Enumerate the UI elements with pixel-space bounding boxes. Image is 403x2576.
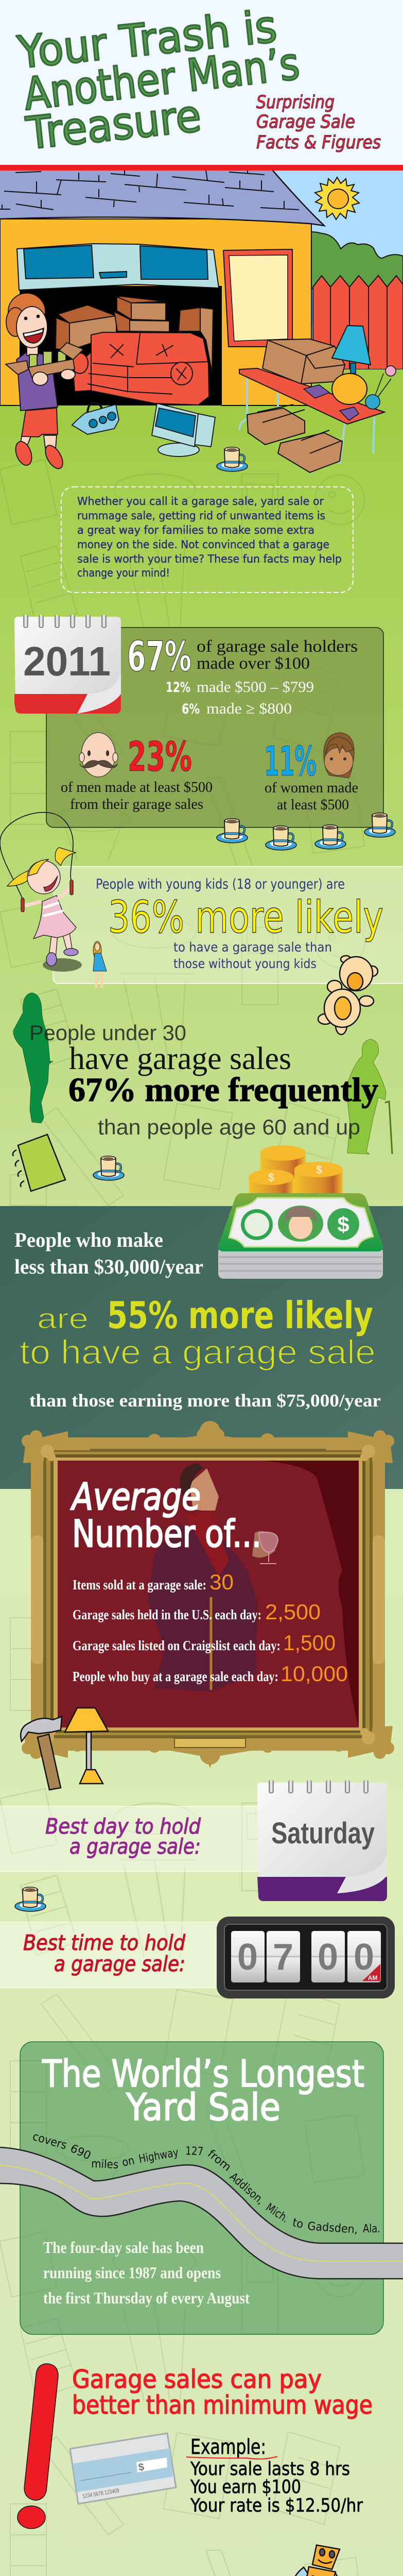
panel heading: Number of... <box>72 1512 261 1555</box>
ground boxes <box>247 404 342 472</box>
text: example calculation <box>186 2435 363 2516</box>
icon: bank check: 1234 5678 123409 <box>82 2487 120 2500</box>
intro paragraph: Whether you call it a garage sale, yard sale or <box>77 495 324 507</box>
text: people under 30: People under 30 <box>29 1021 186 1045</box>
stat: 12% made $500-$799: made $500 – $799 <box>197 679 314 696</box>
icon: notebook <box>13 1134 65 1191</box>
stat: 11% of women: 11% <box>264 739 317 785</box>
intro paragraph: change your mind! <box>77 567 170 579</box>
text: road route: Mich. <box>264 2201 291 2226</box>
garage door <box>17 244 219 290</box>
computer monitor <box>152 403 215 456</box>
title: Treasure <box>24 90 203 160</box>
text: road route: miles <box>91 2158 119 2172</box>
icon: calendar 2011: 2011 <box>23 638 111 684</box>
stat rows: Items sold at a garage sale: <box>73 1577 206 1592</box>
text: example calculation: You earn $100 <box>190 2477 301 2498</box>
stat rows: Garage sales listed on Craigslist each day: <box>73 1638 281 1653</box>
icon: flip clock 07:00 AM: 0 <box>237 1937 258 1978</box>
icon: coffee cups row <box>217 813 395 850</box>
icon: calendar 2011 <box>14 615 121 714</box>
text: young kids end <box>173 940 332 971</box>
icon: gold coins: $ <box>316 1163 322 1176</box>
frame <box>22 1421 394 1768</box>
garage interior <box>20 286 222 405</box>
text: young kids end: to have a garage sale than <box>173 940 332 955</box>
text: young kids lead: People with young kids (18 or younger) are <box>96 876 345 892</box>
band: best time: Best time to hold <box>23 1930 186 1955</box>
icon: doll <box>93 941 107 988</box>
text: four-day sale: the first Thursday of every August <box>43 2289 250 2307</box>
text: income comparison: People who make <box>14 1228 163 1251</box>
icon: stack of money <box>218 1193 383 1279</box>
text: road route: 690 <box>68 2142 93 2163</box>
background: sky header <box>0 0 403 165</box>
text: income comparison: to have a garage sale <box>20 1333 376 1371</box>
stat rows: People who buy at a garage sale each day: <box>73 1669 278 1684</box>
road <box>0 2147 403 2279</box>
icon: flip clock 07:00 AM: 0 <box>318 1937 338 1978</box>
icon: gold coins <box>249 1145 343 1194</box>
stat: 11% of women: of women made <box>265 779 358 796</box>
background: pale green lower section <box>0 1489 403 2576</box>
subtitle: Surprising <box>256 92 335 113</box>
background: dark teal income section <box>0 1206 403 1489</box>
band: best time <box>0 1922 226 1988</box>
text: four-day sale: running since 1987 and opens <box>43 2263 221 2282</box>
icon: robot <box>290 2545 343 2576</box>
text: income comparison: are <box>37 1302 89 1334</box>
text: four-day sale <box>43 2238 250 2307</box>
stat: 23% of men: from their garage sales <box>70 796 203 812</box>
text: example calculation: Your rate is $12.50/hr <box>190 2495 363 2516</box>
text: road route: on <box>121 2154 136 2170</box>
panel heading <box>42 2052 364 2129</box>
stat rows: Garage sales held in the U.S. each day: <box>73 1607 261 1622</box>
band: best day: Best day to hold <box>45 1814 201 1839</box>
icon: coffee cup <box>217 447 248 471</box>
stat: 67% made over $100 <box>127 633 358 681</box>
silhouette: young woman <box>13 993 53 1123</box>
stat rows: 2,500 <box>265 1600 321 1624</box>
stat: 67% made over $100: of garage sale holders <box>197 637 358 656</box>
panel heading: Average <box>71 1475 201 1518</box>
text: road route: 127 <box>185 2145 204 2158</box>
text: people under 30: 67% more frequently <box>68 1071 378 1109</box>
stat: 12% made $500-$799: 12% <box>166 680 190 696</box>
panel heading <box>71 1475 261 1555</box>
text: road route: from <box>205 2147 234 2174</box>
icon: stack of money: $ <box>337 1212 349 1236</box>
text: road route: Gadsden, <box>307 2220 358 2236</box>
text: better than minimum wage <box>72 2365 373 2420</box>
text: example calculation: Example: <box>190 2435 266 2459</box>
subtitle <box>256 92 381 153</box>
band: best time: a garage sale: <box>54 1952 185 1976</box>
house wall <box>0 219 311 405</box>
stat: 11% of women <box>264 739 358 813</box>
man holding box <box>6 293 83 471</box>
icon: man with moustache <box>79 733 118 777</box>
roof <box>0 171 324 226</box>
stat rows: 1,500 <box>283 1631 336 1655</box>
icon: sun <box>315 177 359 219</box>
icon: flip clock 07:00 AM <box>217 1917 395 1998</box>
icon: exclamation mark <box>17 2364 58 2529</box>
text: road route: to <box>291 2216 305 2231</box>
stacked boxes in garage <box>56 296 213 372</box>
text: people under 30: have garage sales <box>69 1041 291 1076</box>
text: example calculation: Your sale lasts 8 hrs <box>190 2459 350 2480</box>
text: road route: Highway <box>138 2146 180 2166</box>
panel: picture frame average numbers <box>22 1421 394 1768</box>
subtitle: Garage Sale <box>256 112 355 132</box>
text: income comparison: less than $30,000/year <box>14 1255 203 1278</box>
illustration: house and garage sale <box>0 171 403 472</box>
band: best day: a garage sale: <box>69 1834 201 1859</box>
icon: coffee cup <box>15 1887 46 1911</box>
yard sale table <box>239 326 396 464</box>
intro paragraph: a great way for families to make some extra <box>77 524 314 536</box>
icon: gold coins: $ <box>268 1171 274 1184</box>
stat rows <box>73 1570 348 1686</box>
title: Another Man’s <box>21 38 302 121</box>
stat: 23% of men: 23% <box>128 734 192 781</box>
text: road route: Addison, <box>227 2171 267 2207</box>
icon: bank check <box>70 2433 176 2504</box>
icon: bank check: $ <box>137 2461 145 2473</box>
painting canvas <box>58 1461 359 1727</box>
intro paragraph: sale is worth your time? These fun facts may help <box>77 553 342 565</box>
icon: flip clock 07:00 AM: 0 <box>354 1937 374 1978</box>
text: young kids end: those without young kids <box>173 956 317 971</box>
background: green lawn section <box>0 405 403 1207</box>
band: best day <box>0 1806 268 1871</box>
panel: world's longest yard sale <box>0 2042 403 2334</box>
icon: woman face <box>324 733 354 778</box>
text: income comparison: than those earning more than $75,000/year <box>29 1391 381 1411</box>
stat rows: 30 <box>209 1570 234 1594</box>
stat: 23% of men <box>61 734 213 812</box>
icon: hammer <box>21 1717 62 1790</box>
icon: flip clock 07:00 AM: 7 <box>273 1937 293 1978</box>
text: road route <box>31 2130 380 2236</box>
subtitle: Facts & Figures <box>256 132 381 153</box>
silhouette: old man with cane <box>346 1039 392 1154</box>
title <box>15 1 302 160</box>
icon: yellow lamp <box>65 1708 108 1784</box>
house window <box>223 249 292 347</box>
intro text box <box>61 487 353 592</box>
panel heading: Yard Sale <box>126 2086 281 2129</box>
icon: teddy bear <box>318 956 378 1035</box>
fence <box>313 276 403 371</box>
illustration: girl jumping rope <box>0 812 82 972</box>
intro paragraph: money on the side. Not convinced that a garage <box>77 538 329 551</box>
stat: 6% made at least $800: 6% <box>182 701 200 717</box>
icon: coffee cup <box>93 1156 124 1180</box>
stat: 6% made at least $800: made ≥ $800 <box>206 700 292 717</box>
panel: earnings stats <box>46 628 383 827</box>
icon: Saturday calendar: Saturday <box>271 1817 375 1850</box>
panel: young kids <box>0 867 403 984</box>
icon: Saturday calendar <box>257 1780 387 1901</box>
red sofa <box>72 332 209 405</box>
title: Your Trash is <box>15 1 279 79</box>
intro paragraph: rummage sale, getting rid of unwanted items is <box>77 510 325 522</box>
intro paragraph <box>77 495 342 579</box>
boombox <box>72 403 119 434</box>
icon: flip clock 07:00 AM: AM <box>368 1974 377 1981</box>
text: people under 30: than people age 60 and up <box>98 1115 360 1139</box>
stat: 23% of men: of men made at least $500 <box>61 779 213 795</box>
painted gentleman <box>148 1463 278 1691</box>
hedge <box>311 232 403 289</box>
stat: 67% made over $100: made over $100 <box>197 654 310 673</box>
text: road route: Ala. <box>363 2223 380 2235</box>
text: four-day sale: The four-day sale has been <box>43 2238 204 2257</box>
red divider top <box>0 165 403 171</box>
text: better than minimum wage: Garage sales can pay <box>72 2365 322 2394</box>
stat rows: 10,000 <box>281 1662 348 1686</box>
stat: 67% made over $100: 67% <box>127 633 191 681</box>
text: people under 30 <box>29 1021 378 1139</box>
text: income comparison <box>14 1228 381 1411</box>
stat: 11% of women: at least $500 <box>277 796 349 813</box>
text: road route: covers <box>31 2130 68 2153</box>
